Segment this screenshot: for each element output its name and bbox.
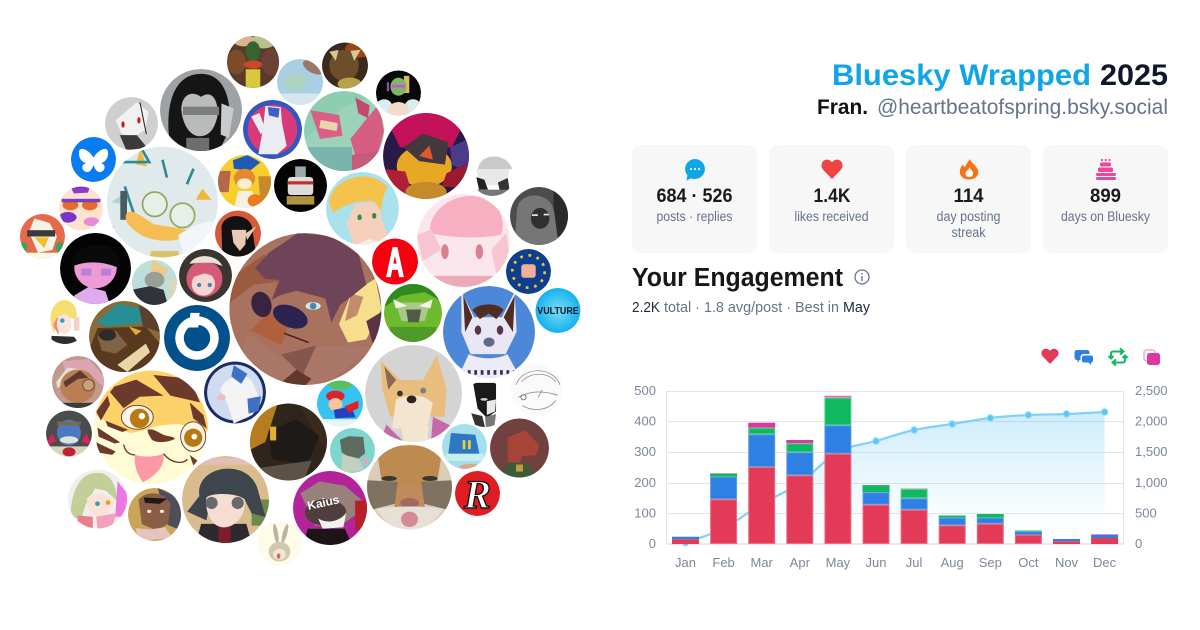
panel: posting streak <box>906 145 1031 253</box>
stat label <box>936 209 1000 240</box>
stat value: 684 · 526 <box>656 186 732 207</box>
avatar: EU fist <box>506 249 551 294</box>
month labels: Sep <box>979 555 1002 570</box>
month labels <box>675 555 1117 570</box>
avatar: vulture: VULTURE <box>537 306 579 317</box>
avatar: green boar <box>384 284 442 342</box>
display name: Fran. <box>817 96 868 119</box>
panel: likes received <box>769 145 894 253</box>
avatar: pale sky creature <box>277 57 325 105</box>
stacked bars <box>672 396 1118 544</box>
bar: Feb <box>710 473 737 544</box>
card background <box>1043 145 1168 253</box>
engagement summary: total · 1.8 avg/post · Best in <box>664 300 839 316</box>
avatar: pink sunglasses <box>59 186 103 230</box>
bar: May <box>824 396 851 544</box>
avatar: brown bull <box>322 42 368 88</box>
bar: Jun <box>862 485 890 544</box>
avatar: red A <box>372 238 418 285</box>
icon: quote squares <box>1144 350 1160 365</box>
avatar: vulture <box>536 288 580 333</box>
left axis labels <box>634 383 656 551</box>
month labels: Jan <box>675 555 696 570</box>
left axis labels: 0 <box>649 536 656 551</box>
right axis labels: 1,500 <box>1135 444 1168 459</box>
month labels: Jul <box>906 555 923 570</box>
month labels: May <box>826 555 851 570</box>
month labels: Aug <box>941 555 964 570</box>
avatar: yellow mascot <box>218 155 271 208</box>
avatar: pirate group <box>227 34 280 88</box>
icon: flame <box>960 159 978 180</box>
avatar: white wolf on blue <box>443 286 535 378</box>
avatar: red R: R <box>463 472 491 517</box>
avatar: red A: A <box>386 239 404 285</box>
bar: Nov <box>1053 539 1080 544</box>
engagement summary: 2.2K <box>632 300 660 316</box>
avatar cloud <box>20 34 580 566</box>
cumulative area fill <box>686 412 1105 544</box>
right axis labels: 500 <box>1135 506 1157 520</box>
user name and handle <box>817 95 1168 119</box>
panel: days on Bluesky <box>1043 145 1168 253</box>
bar: Jan <box>672 536 699 544</box>
avatar: pink face on black <box>60 233 131 304</box>
bar: Oct <box>1015 530 1042 544</box>
avatar: cream bunny <box>257 521 302 566</box>
card background <box>769 145 894 253</box>
title <box>832 59 1168 92</box>
grid lines <box>666 391 1124 544</box>
avatar: main character with sunglasses <box>230 233 382 385</box>
avatar: teal cat <box>330 428 375 473</box>
icon: birthday cake <box>1096 159 1116 180</box>
bar: Mar <box>748 423 775 544</box>
title: Bluesky Wrapped: Bluesky Wrapped <box>832 59 1091 92</box>
avatar: pink monsters <box>304 91 384 171</box>
left axis labels: 500 <box>634 383 656 398</box>
avatar: dark soldier <box>250 404 327 480</box>
avatar: kaius raccoon: Kaius <box>306 492 341 513</box>
avatar: red R <box>455 471 500 517</box>
icon: info <box>855 270 869 284</box>
stat label: days on Bluesky <box>1061 209 1150 224</box>
avatar: brown face pink hat <box>52 356 104 408</box>
avatar: grey rat blonde <box>132 260 177 305</box>
icon: replies bubbles <box>1074 350 1093 365</box>
avatar: pink blob <box>417 194 510 287</box>
stat value: 899 <box>1090 186 1121 207</box>
title: year: 2025 <box>1100 59 1168 92</box>
stat label: likes received <box>794 209 868 224</box>
stat label: posts · replies <box>656 209 733 224</box>
month labels: Nov <box>1055 555 1079 570</box>
avatar: brown bear teal hair <box>89 301 160 372</box>
chart: monthly engagement <box>634 383 1168 570</box>
card background <box>906 145 1031 253</box>
icon: likes heart <box>1041 349 1059 364</box>
avatar: blonde boy <box>326 172 399 245</box>
avatar: grey manga woman <box>160 69 242 153</box>
left axis labels: 100 <box>634 506 656 520</box>
avatar: IL blue <box>442 424 487 473</box>
avatar: silver hedgehog with glasses <box>107 146 218 258</box>
right axis labels: 2,000 <box>1135 414 1168 428</box>
avatar: green girl on black <box>376 70 421 116</box>
avatar: tan orc <box>128 488 181 541</box>
avatar: chibi black hair <box>182 456 269 543</box>
avatar: fire creature <box>383 113 469 202</box>
icon: heart <box>821 160 843 179</box>
right axis labels: 0 <box>1135 536 1142 551</box>
avatar: maid pink hair <box>179 249 232 302</box>
avatar: black robot <box>274 159 327 212</box>
right axis labels: 1,000 <box>1135 475 1168 490</box>
left axis labels: 400 <box>634 414 656 428</box>
cumulative line with points <box>682 409 1108 546</box>
avatar: dark elf on orange <box>215 210 261 256</box>
month labels: Oct <box>1018 555 1039 570</box>
avatar: mario <box>317 380 363 426</box>
heading: Your Engagement: Your Engagement <box>632 264 843 292</box>
left axis labels: 300 <box>634 444 656 459</box>
left axis labels: 200 <box>634 475 656 490</box>
handle: @heartbeatofspring.bsky.social <box>877 95 1168 119</box>
avatar: blue frog <box>46 410 92 456</box>
bar: Aug <box>939 516 966 544</box>
stat value: 114 <box>954 186 984 207</box>
avatar: green hair girl <box>68 470 127 528</box>
panel: posts and replies <box>632 145 757 253</box>
month labels: Feb <box>712 555 735 570</box>
stat value: 1.4K <box>814 186 851 207</box>
stat label: streak <box>952 225 986 240</box>
avatar: bluesky butterfly <box>71 137 116 182</box>
month labels: Dec <box>1093 555 1117 570</box>
month labels: Mar <box>751 555 774 570</box>
avatar: blonde pink glasses <box>42 299 88 344</box>
avatar: red lizard portrait <box>490 418 549 478</box>
month labels: Apr <box>790 555 811 570</box>
right axis labels <box>1135 383 1168 551</box>
avatar: white bird <box>20 214 65 259</box>
bar: Apr <box>786 440 813 544</box>
avatar: tiger photo <box>367 444 452 530</box>
avatar: shiba on grey <box>365 345 462 442</box>
bar: Dec <box>1091 534 1118 544</box>
card background <box>632 145 757 253</box>
month labels: Jun <box>866 555 886 570</box>
icon: repost arrows <box>1108 348 1128 366</box>
avatar: manga cap <box>476 156 512 196</box>
avatar: blue badge wolf <box>243 100 302 159</box>
icon: chat bubble <box>685 159 705 181</box>
bar: Sep <box>977 514 1004 544</box>
engagement summary: May <box>843 300 871 316</box>
avatar: blue ring logo <box>164 305 230 371</box>
avatar: dark grey portrait <box>510 187 568 245</box>
avatar: white wolf <box>204 362 266 424</box>
stat label: day posting <box>936 209 1000 224</box>
avatar: kaius raccoon <box>293 471 367 545</box>
avatar: black mask <box>471 382 496 427</box>
avatar: yellow tiger with tongue <box>94 370 208 484</box>
right axis labels: 2,500 <box>1135 383 1168 398</box>
avatar: line sketch <box>516 370 560 410</box>
avatar: manga red eyes <box>105 97 158 150</box>
bar: Jul <box>901 488 928 544</box>
chart legend <box>1041 348 1160 366</box>
